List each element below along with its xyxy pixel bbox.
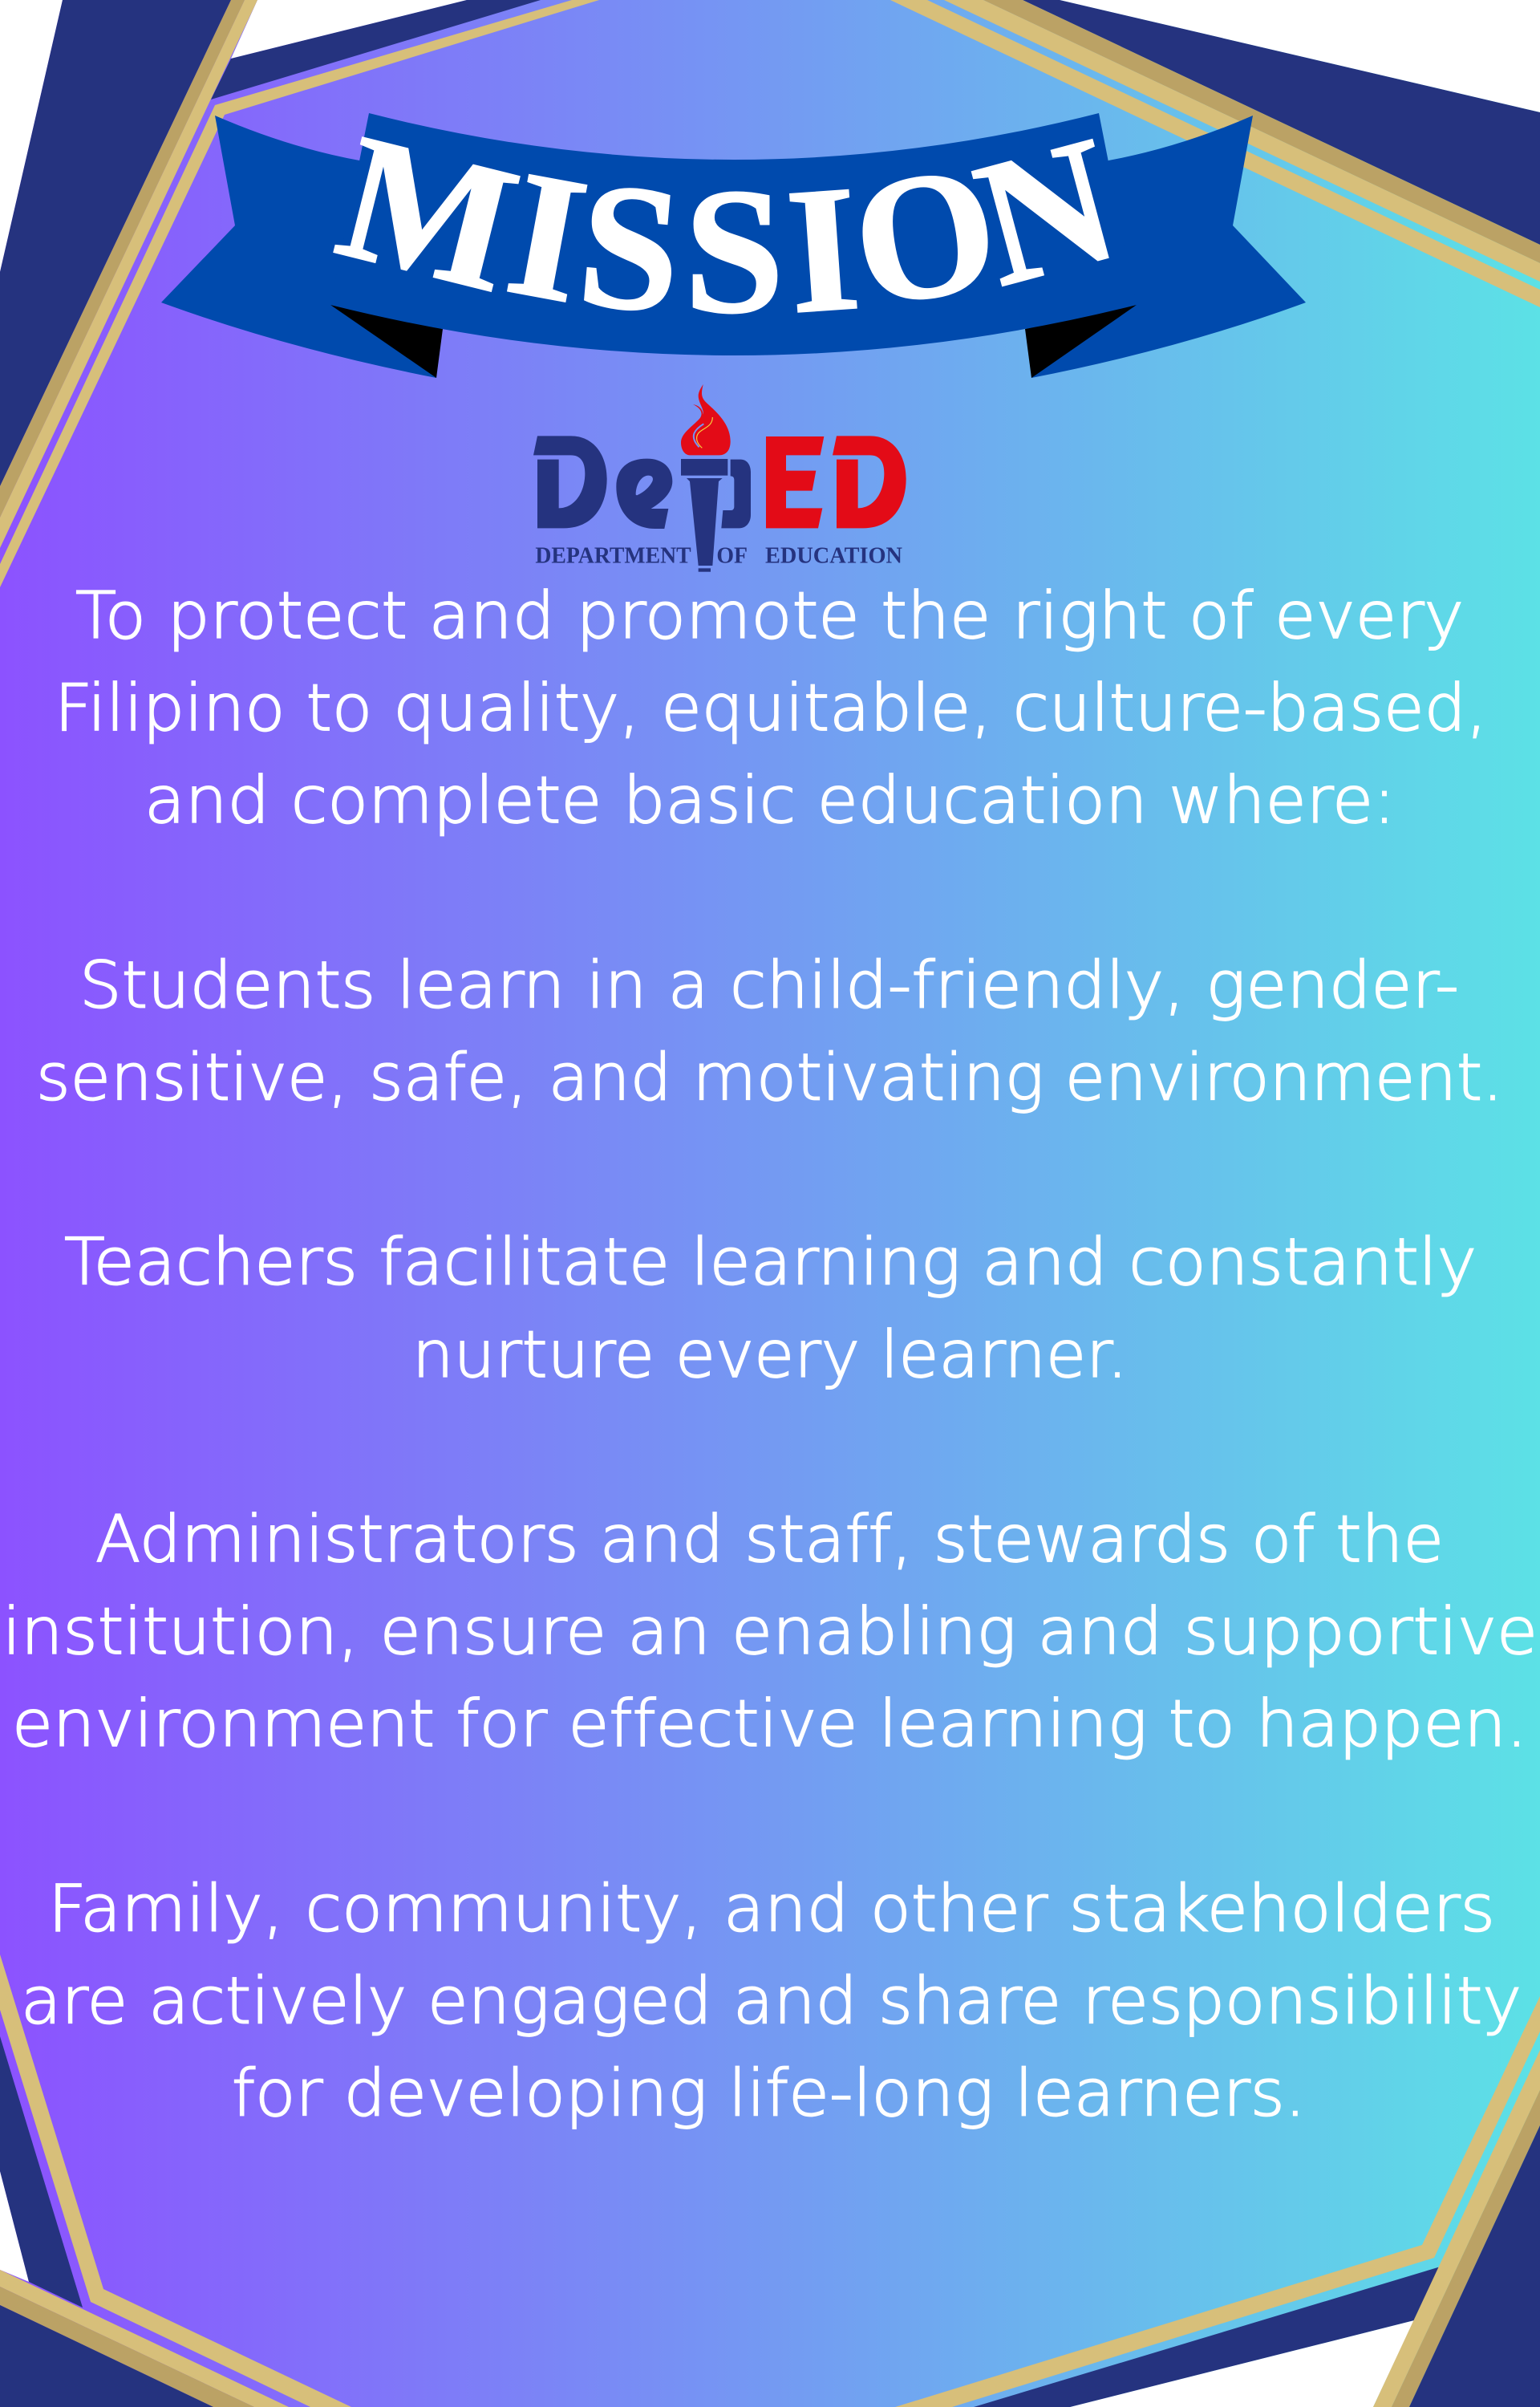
mission statement text block: institution, ensure an enabling and supportive (2, 1594, 1538, 1669)
ribbon right fold (1025, 305, 1137, 378)
ribbon right tail (1025, 116, 1306, 378)
logo caption: DEPARTMENT (535, 543, 691, 569)
mission statement text block: Administrators and staff, stewards of the (95, 1502, 1444, 1577)
mission statement text block: Filipino to quality, equitable, culture-based, (55, 671, 1487, 745)
ribbon left fold (330, 305, 443, 378)
mission statement text block: Students learn in a child-friendly, gender- (79, 948, 1459, 1022)
mission statement text block (2, 578, 1538, 2131)
mission statement text block: To protect and promote the right of every (75, 578, 1464, 653)
mission statement text block: Family, community, and other stakeholders (48, 1871, 1495, 1946)
mission statement text block: are actively engaged and share responsibility (21, 1964, 1522, 2038)
title text: MISSION (322, 96, 1135, 351)
frame: bottom-left corner (0, 1954, 351, 2407)
ribbon left tail (161, 116, 443, 378)
frame: top-right corner (890, 0, 1540, 307)
DepEd logo (533, 384, 906, 572)
ribbon main band (330, 113, 1137, 355)
mission statement text block: for developing life-long learners. (232, 2056, 1306, 2131)
logo letter E red (766, 436, 824, 528)
logo caption: OF (716, 543, 748, 569)
logo letter D navy (533, 436, 607, 528)
logo letter e (616, 459, 672, 529)
mission statement text block: environment for effective learning to happen. (12, 1687, 1527, 1761)
logo letter D red (833, 436, 906, 528)
frame: bottom-right corner (895, 1996, 1540, 2407)
logo caption: EDUCATION (765, 543, 902, 569)
mission statement text block: sensitive, safe, and motivating environment. (36, 1040, 1503, 1115)
mission statement text block: and complete basic education where: (144, 763, 1396, 838)
title ribbon (161, 96, 1306, 378)
mission statement text block: Teachers facilitate learning and constantly (64, 1225, 1477, 1300)
frame: top-left corner (0, 0, 599, 587)
logo torch and bracket (681, 459, 751, 572)
mission statement text block: nurture every learner. (412, 1317, 1128, 1392)
logo flame (681, 384, 731, 455)
